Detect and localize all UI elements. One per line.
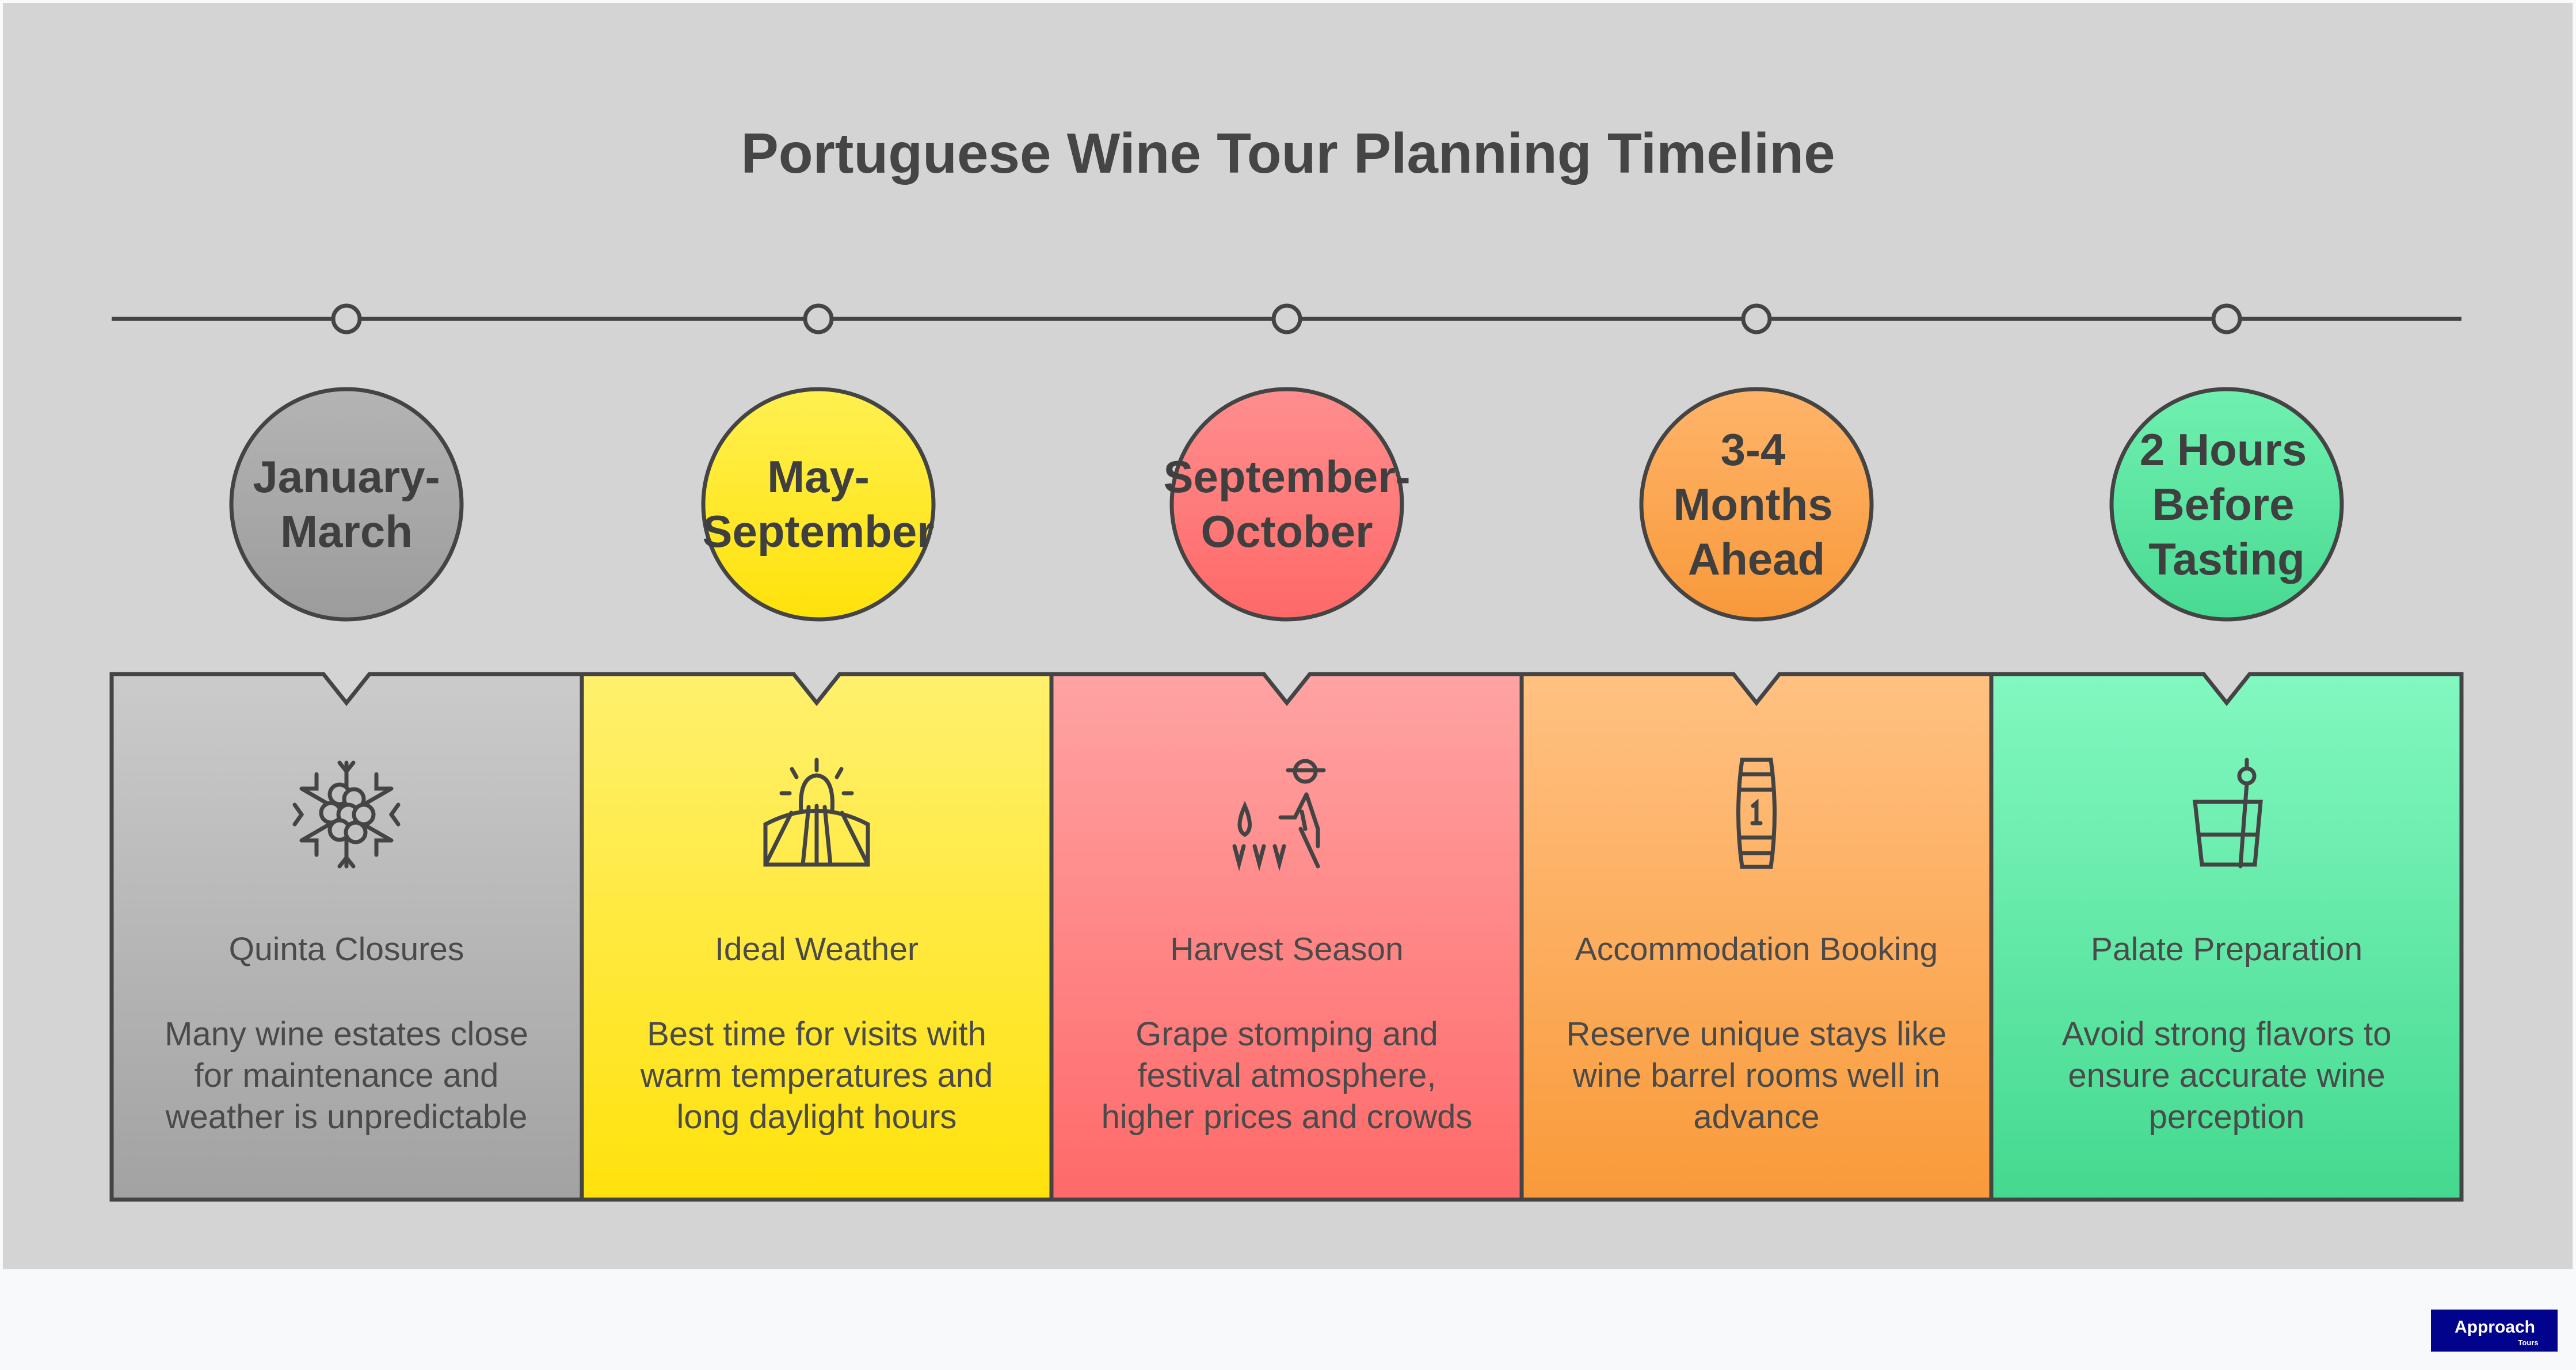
icon: grape stomping person [1234, 761, 1324, 866]
panel: Palate Preparation: Palate Preparation [2091, 931, 2362, 968]
circle: September-October: September- [1163, 451, 1411, 502]
panel: Accommodation Booking: Accommodation Booking [1575, 931, 1938, 968]
circle: May-September: May- [767, 451, 870, 502]
circle: September-October [1163, 389, 1411, 619]
logo: Approach Tours: Tours [2518, 1338, 2539, 1347]
circle: September-October: October [1201, 506, 1373, 557]
icon: snowflake grapes [295, 763, 398, 866]
circle: 3-4 Months Ahead: Months [1673, 479, 1833, 530]
circle: 3-4 Months Ahead: Ahead [1688, 534, 1825, 584]
panel: Ideal Weather: long daylight hours [677, 1098, 957, 1136]
panel: Quinta Closures [112, 674, 582, 1200]
panel: Accommodation Booking [1522, 674, 1991, 1200]
circle: May-September: September [702, 506, 935, 557]
icon: sun over vineyard [765, 760, 868, 865]
circle: 3-4 Months Ahead: 3-4 [1721, 424, 1785, 475]
panel: Quinta Closures: for maintenance and [195, 1057, 498, 1094]
panel: Palate Preparation [1991, 674, 2461, 1200]
icon: glass with stirrer [2195, 760, 2261, 866]
panel: Palate Preparation: ensure accurate wine [2068, 1057, 2386, 1094]
panel: Ideal Weather: warm temperatures and [640, 1057, 993, 1094]
panel: Palate Preparation: Avoid strong flavors to [2062, 1015, 2391, 1053]
circle: January-March [231, 389, 462, 619]
panel: Accommodation Booking: advance [1693, 1098, 1820, 1136]
circle: 2 Hours Before Tasting: 2 Hours [2140, 424, 2307, 475]
circle: 2 Hours Before Tasting [2112, 389, 2342, 619]
panel: Ideal Weather: Best time for visits with [647, 1015, 986, 1053]
circle: 3-4 Months Ahead [1641, 389, 1872, 619]
title: Portuguese Wine Tour Planning Timeline [741, 121, 1835, 185]
panel: Accommodation Booking: Reserve unique stays like [1567, 1015, 1946, 1053]
circle: January-March: January- [253, 451, 440, 502]
timeline line with markers [112, 306, 2461, 332]
panel: Harvest Season: higher prices and crowds [1102, 1098, 1472, 1136]
panel: Quinta Closures: Quinta Closures [229, 931, 464, 968]
circle: January-March: March [280, 506, 413, 557]
panel: Palate Preparation: perception [2149, 1098, 2304, 1136]
icon: wine barrel [1738, 760, 1775, 867]
panel: Quinta Closures: Many wine estates close [165, 1015, 528, 1053]
panel: Harvest Season: festival atmosphere, [1137, 1057, 1436, 1094]
panel: Quinta Closures: weather is unpredictable [165, 1098, 527, 1136]
logo: Approach Tours: Approach [2455, 1318, 2535, 1337]
panel: Harvest Season [1051, 674, 1522, 1200]
logo: Approach Tours [2431, 1310, 2558, 1352]
circle: 2 Hours Before Tasting: Before [2152, 479, 2295, 530]
circle: May-September [702, 389, 935, 619]
circle: 2 Hours Before Tasting: Tasting [2148, 534, 2305, 584]
panel: Harvest Season: Harvest Season [1170, 931, 1404, 968]
panel: Accommodation Booking: wine barrel rooms well in [1572, 1057, 1940, 1094]
panel: Ideal Weather [582, 674, 1051, 1200]
panel: Ideal Weather: Ideal Weather [715, 931, 919, 968]
panel: Harvest Season: Grape stomping and [1135, 1015, 1438, 1053]
